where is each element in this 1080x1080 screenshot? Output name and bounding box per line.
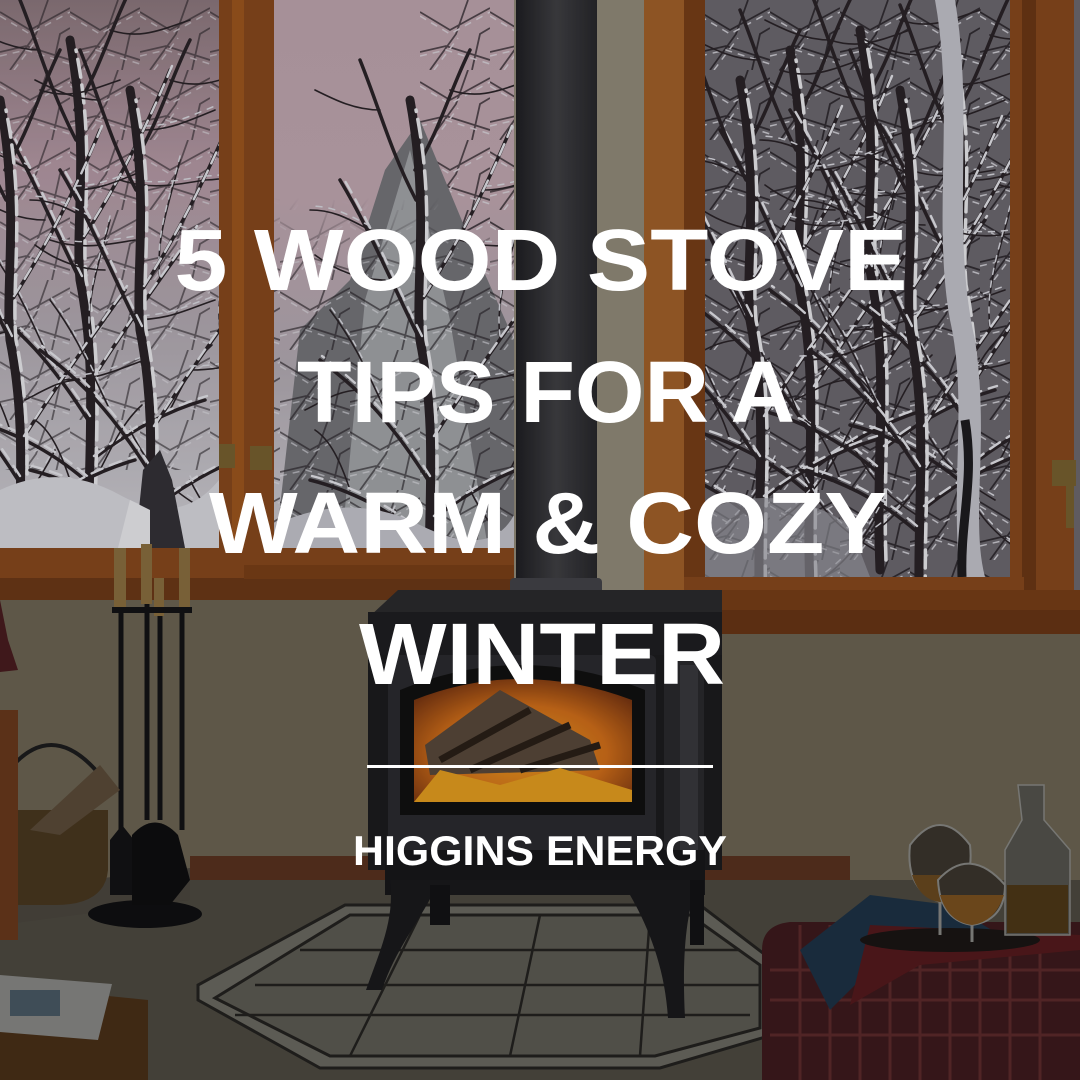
window frames (0, 0, 1080, 634)
magazine on table (0, 975, 148, 1080)
glasses and decanter (909, 785, 1070, 942)
divider line (367, 765, 713, 768)
far right window sliver (1074, 0, 1080, 600)
stove (366, 590, 722, 1018)
left window view (0, 0, 219, 548)
brand name: HIGGINS ENERGY (353, 827, 727, 874)
title: TIPS FOR A (297, 344, 795, 441)
title: 5 WOOD STOVE (174, 212, 907, 309)
copper bucket with logs (2, 745, 120, 905)
centre window view (274, 0, 514, 548)
title: WARM & COZY (209, 475, 887, 572)
left table and plant (0, 600, 18, 940)
title (174, 212, 907, 703)
hearth (198, 905, 772, 1068)
right window view (705, 0, 1010, 577)
flue pipe (510, 0, 602, 598)
title: WINTER (359, 606, 725, 703)
window latches (219, 444, 1076, 528)
ottoman with throw (762, 895, 1080, 1080)
fireplace tools (88, 544, 202, 928)
baseboard and floor (190, 856, 850, 890)
